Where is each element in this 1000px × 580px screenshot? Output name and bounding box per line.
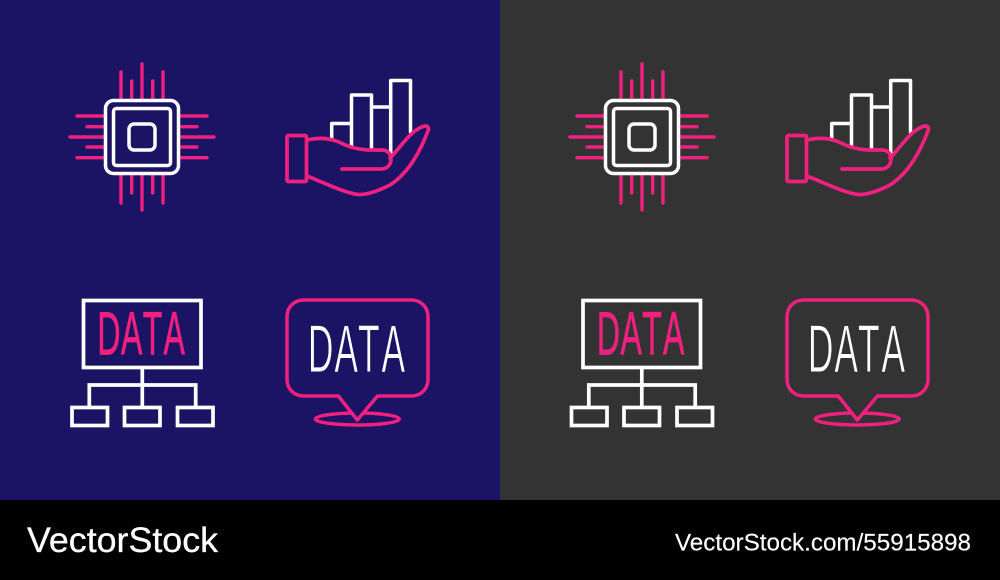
footer bar: [0, 500, 1000, 580]
icon: microchip (navy panel): [70, 64, 214, 210]
icon: data hierarchy network (grey panel): [572, 300, 712, 426]
panel: dark grey background: [500, 0, 1000, 500]
footer image id: VectorStock.com/55915898: VectorStock.com/55915898: [675, 530, 971, 556]
icon: hand holding bar chart (navy panel): [287, 80, 428, 195]
footer logo: VectorStock: VectorStock: [27, 520, 218, 560]
icon: data location pin bubble (grey panel): [787, 300, 928, 425]
label: DATA in bubble: DATA: [308, 312, 406, 387]
label: DATA in screen: DATA: [97, 301, 185, 368]
icon: data hierarchy network (navy panel): [72, 300, 213, 426]
icon: hand holding bar chart (grey panel): [787, 80, 928, 195]
icon: microchip (grey panel): [570, 64, 714, 210]
label: DATA in screen: DATA: [597, 301, 685, 368]
label: DATA in bubble: DATA: [808, 312, 906, 387]
panel: navy background: [0, 0, 500, 500]
icon: data location pin bubble (navy panel): [287, 300, 428, 425]
